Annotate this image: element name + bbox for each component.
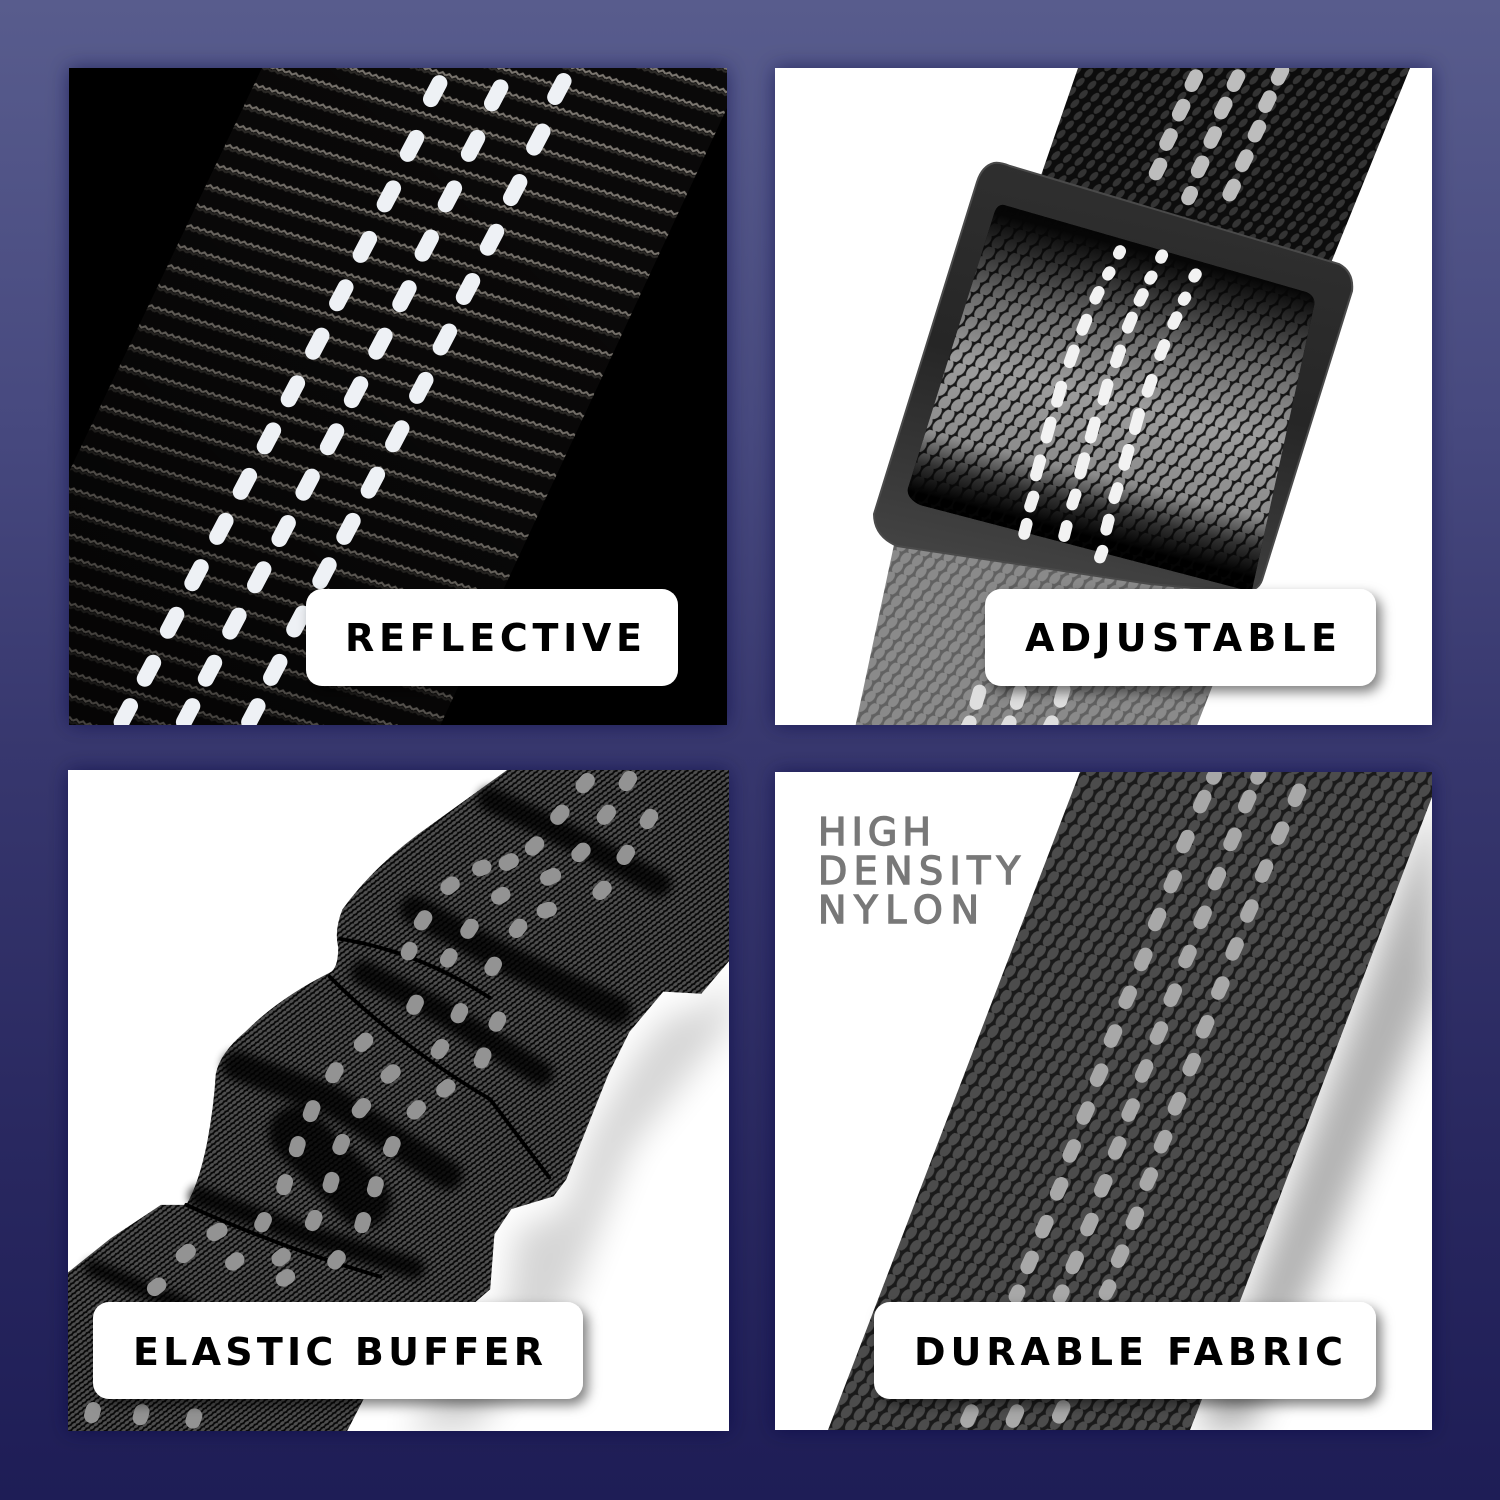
caption: high density nylon: DENSITY	[818, 849, 1021, 893]
label: durable fabric: DURABLE FABRIC	[914, 1330, 1343, 1374]
panel: adjustable	[775, 68, 1432, 728]
label: durable fabric	[874, 1302, 1376, 1399]
caption: high density nylon	[818, 810, 1021, 932]
fold creases	[186, 939, 549, 1277]
panel: elastic buffer	[68, 770, 730, 1432]
caption: high density nylon: NYLON	[818, 888, 979, 932]
strap shadow	[1196, 795, 1435, 1430]
buckle opening with webbing	[908, 205, 1314, 590]
gathered elastic strap	[68, 770, 730, 1432]
label: reflective: REFLECTIVE	[345, 616, 642, 660]
caption: high density nylon: HIGH	[818, 810, 931, 854]
lower stitching	[967, 689, 1064, 727]
reflective stitching	[122, 81, 564, 722]
upper strap	[1041, 68, 1410, 261]
label: reflective	[306, 589, 678, 686]
grey reflective stitching	[92, 778, 651, 1421]
panel: durable fabric	[775, 772, 1435, 1430]
grey stitching	[967, 775, 1299, 1421]
stitching inside buckle	[1024, 251, 1196, 558]
lower grey strap	[856, 546, 1212, 725]
shiny dark bands	[93, 800, 659, 1306]
label: adjustable	[985, 589, 1376, 686]
panel: reflective	[69, 68, 727, 728]
label: adjustable: ADJUSTABLE	[1025, 616, 1337, 660]
strap shadow	[406, 973, 730, 1432]
nylon strap, dark	[69, 68, 727, 728]
label: elastic buffer	[93, 1302, 583, 1399]
woven strap	[828, 772, 1432, 1430]
label: elastic buffer: ELASTIC BUFFER	[133, 1330, 543, 1374]
buckle frame	[874, 163, 1352, 592]
upper stitching	[1156, 70, 1282, 198]
